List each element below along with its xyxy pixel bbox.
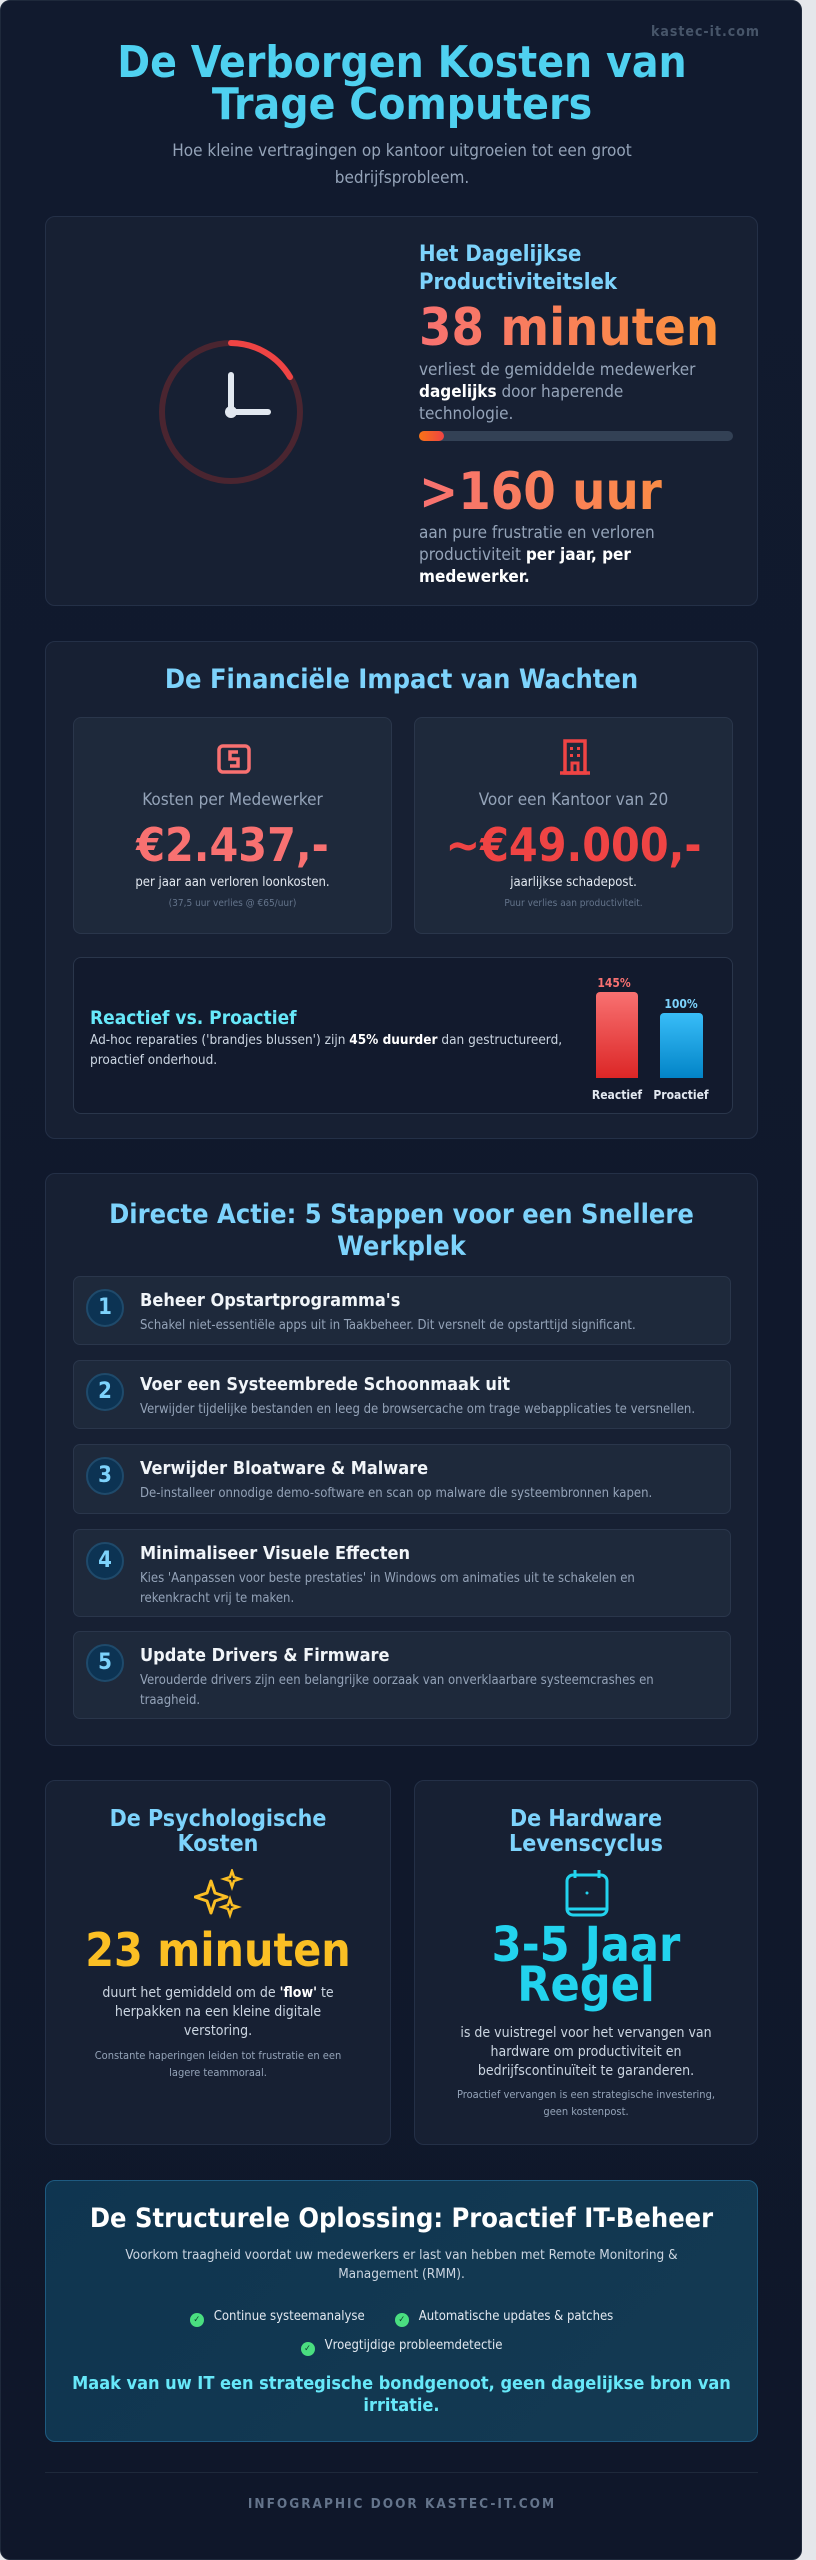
panel: structural solution: Voorkom traagheid voordat uw medewerkers er last van hebben met Remote Monitoring & Management (RMM).	[125, 2247, 678, 2282]
title	[117, 37, 687, 130]
step 2: Verwijder tijdelijke bestanden en leeg de browsercache om trage webapplicaties te versnellen.	[140, 1402, 695, 1417]
step 2: Voer een Systeembrede Schoonmaak uit	[140, 1374, 510, 1395]
watermark: kastec-it.com	[651, 24, 760, 40]
bar chart: 145%	[597, 976, 631, 990]
bar chart: 100%	[664, 997, 698, 1011]
step 1: Schakel niet-essentiële apps uit in Taakbeheer. Dit versnelt de opstarttijd significant.	[140, 1318, 636, 1333]
card: office of 20: Puur verlies aan productiviteit.	[504, 898, 643, 909]
icon: clock	[159, 340, 303, 484]
checklist: ✓	[304, 2344, 311, 2354]
card: reactive vs proactive: Reactief vs. Proactief	[90, 1007, 297, 1029]
callout: Maak van uw IT een strategische bondgenoot, geen dagelijkse bron van irritatie.	[72, 2373, 731, 2416]
step 3: Verwijder Bloatware & Malware	[140, 1458, 428, 1479]
card: office of 20: Voor een Kantoor van 20	[479, 790, 668, 810]
icon: building	[560, 739, 590, 775]
text block: daily leak: Het Dagelijkse Productiviteitslek	[419, 242, 617, 295]
bar chart	[592, 976, 709, 1102]
checklist	[190, 2309, 613, 2356]
panel: structural solution: De Structurele Oplossing: Proactief IT-Beheer	[90, 2203, 713, 2234]
step 4: Kies 'Aanpassen voor beste prestaties' in Windows om animaties uit te schakelen en rekenkracht vrij te maken.	[140, 1571, 635, 1606]
icon: sparkles	[194, 1869, 244, 1919]
card: per employee	[73, 717, 392, 934]
subtitle: Hoe kleine vertragingen op kantoor uitgroeien tot een groot bedrijfsprobleem.	[172, 141, 632, 188]
panel: financial impact	[45, 641, 758, 1139]
panel: psychological cost: Constante haperingen leiden tot frustratie en een lagere teammoraal.	[95, 2049, 341, 2079]
step 2	[73, 1360, 731, 1429]
checklist: Vroegtijdige probleemdetectie	[325, 2338, 502, 2353]
step 5: 5	[98, 1650, 112, 1675]
panel: hardware lifecycle: Proactief vervangen is een strategische investering, geen kostenpost.	[457, 2088, 715, 2118]
heading: De Financiële Impact van Wachten	[165, 664, 638, 695]
checklist: Continue systeemanalyse Automatische updates & patches	[214, 2309, 613, 2324]
step 5: Update Drivers & Firmware	[140, 1645, 390, 1666]
step 1: Beheer Opstartprogramma's	[140, 1290, 400, 1311]
card: per employee: per jaar aan verloren loonkosten.	[135, 875, 330, 890]
step 1	[73, 1276, 731, 1345]
step 3: De-installeer onnodige demo-software en scan op malware die systeembronnen kapen.	[140, 1486, 652, 1501]
panel: psychological cost	[45, 1780, 391, 2145]
heading: Directe Actie: 5 Stappen voor een Snellere Werkplek	[109, 1199, 694, 1262]
card: per employee: €2.437,-	[136, 818, 329, 872]
panel: productivity	[45, 216, 758, 606]
card: office of 20: ~€49.000,-	[445, 818, 702, 872]
panel: hardware lifecycle: Regel	[517, 1957, 655, 2013]
step 4: 4	[98, 1548, 112, 1573]
card: office of 20	[414, 717, 733, 934]
step 4: Minimaliseer Visuele Effecten	[140, 1543, 410, 1564]
panel: psychological cost: 23 minuten	[85, 1923, 351, 1977]
icon: calendar	[566, 1870, 608, 1916]
step 3	[73, 1444, 731, 1514]
progress bar	[419, 431, 733, 441]
text block: daily leak: verliest de gemiddelde medewerker dagelijks door haperende technologie.	[419, 360, 695, 424]
panel: hardware lifecycle: De Hardware	[510, 1806, 662, 1832]
panel: psychological cost: Kosten	[178, 1831, 258, 1857]
card: office of 20: jaarlijkse schadepost.	[510, 875, 637, 890]
text block: yearly: >160 uur	[419, 462, 662, 522]
step 5: Verouderde drivers zijn een belangrijke oorzaak van onverklaarbare systeemcrashes en traagheid.	[140, 1673, 654, 1708]
text block: daily leak	[419, 242, 719, 424]
text block: yearly	[419, 462, 662, 587]
checklist: ✓	[193, 2315, 200, 2325]
step 3: 3	[98, 1463, 112, 1488]
text block: daily leak: 38 minuten	[419, 298, 719, 358]
panel: hardware lifecycle: Levenscyclus	[509, 1831, 663, 1857]
icon: money	[217, 744, 251, 774]
card: per employee: (37,5 uur verlies @ €65/uur)	[169, 898, 296, 909]
card: per employee: Kosten per Medewerker	[142, 790, 323, 810]
panel: structural solution	[45, 2180, 758, 2442]
panel: psychological cost: De Psychologische	[110, 1806, 326, 1832]
step 5	[73, 1631, 731, 1719]
step 4	[73, 1529, 731, 1617]
bar chart: Reactief	[592, 1088, 642, 1102]
panel: hardware lifecycle: is de vuistregel voor het vervangen van hardware om productiviteit en bedrijfscontinuïteit te garanderen.	[460, 2025, 712, 2079]
title: Trage Computers	[212, 79, 592, 130]
footer: INFOGRAPHIC DOOR KASTEC-IT.COM	[248, 2496, 556, 2512]
checklist: ✓	[398, 2315, 405, 2325]
panel: 5 steps	[45, 1173, 758, 1746]
step 1: 1	[98, 1295, 112, 1320]
step 2: 2	[98, 1379, 112, 1404]
card: reactive vs proactive	[73, 957, 733, 1114]
text block: yearly: aan pure frustratie en verloren productiviteit per jaar, per medewerker.	[419, 523, 655, 587]
title: De Verborgen Kosten van	[117, 37, 687, 88]
card: reactive vs proactive: Ad-hoc reparaties ('brandjes blussen') zijn 45% duurder dan gestructureerd, proactief onderhoud.	[90, 1032, 562, 1068]
panel: hardware lifecycle: 3-5 Jaar	[492, 1917, 680, 1973]
panel: hardware lifecycle	[414, 1780, 758, 2145]
panel: psychological cost: duurt het gemiddeld om de 'flow' te herpakken na een kleine digitale verstoring.	[102, 1985, 334, 2039]
bar chart: Proactief	[653, 1088, 709, 1102]
